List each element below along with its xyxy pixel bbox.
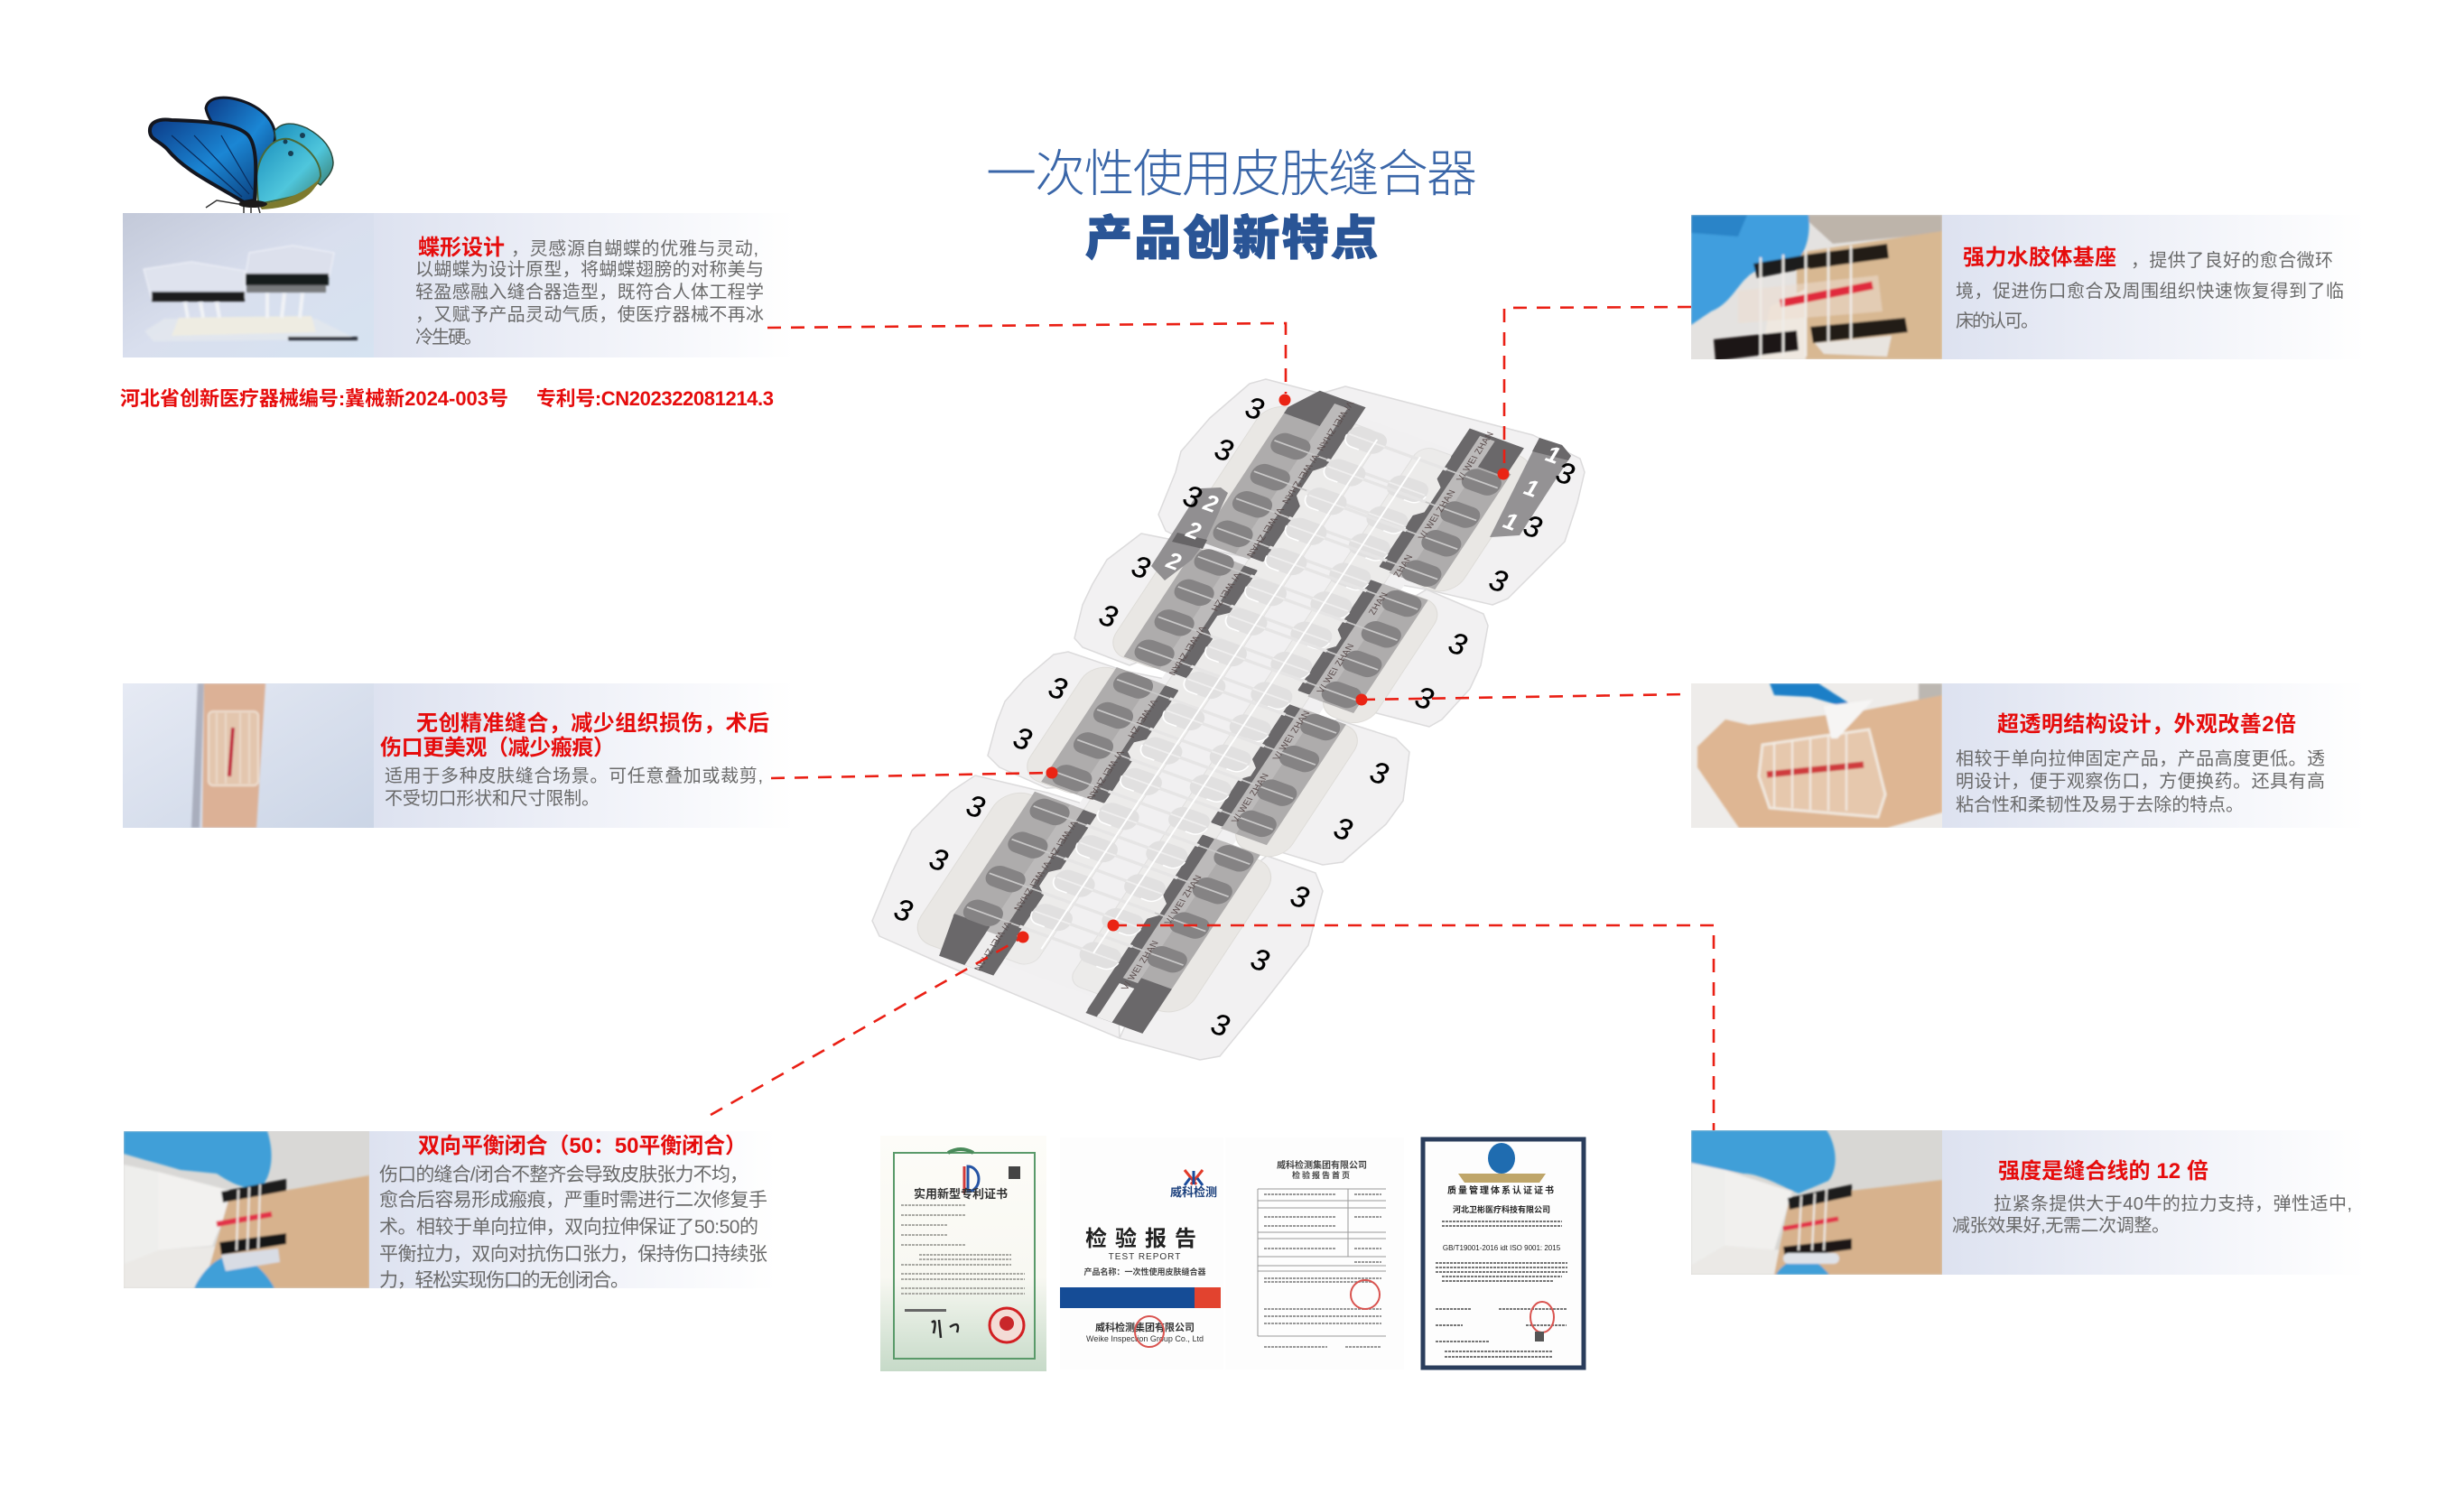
strip labels: V/ WEI ZHAN (972, 920, 1012, 972)
photo: hands applying device (1691, 215, 1942, 361)
heading: 超透明结构设计，外观改善2倍 (1997, 711, 2296, 737)
panel: hydrocolloid base (1691, 215, 2366, 361)
patent line (120, 387, 774, 410)
body text (1956, 748, 2325, 815)
numerals 3: 3 (1411, 680, 1438, 717)
numerals 3: 3 (1095, 598, 1122, 635)
certificate: utility model patent: 实用新型专利证书 (914, 1187, 1008, 1201)
certificate: test report first page (1225, 1137, 1404, 1369)
white guide lines (1041, 440, 1421, 965)
strip labels: ZHAN (1367, 591, 1390, 616)
tab: number 1 (1490, 438, 1571, 537)
strip labels: ZHAN (1392, 553, 1416, 579)
body text: 适用于多种皮肤缝合场景。可任意叠加或裁剪, (385, 766, 763, 786)
tab: number 2: 2 (1182, 515, 1205, 545)
patent line: 专利号:CN202322081214.3 (536, 387, 774, 410)
strip labels (972, 384, 1496, 1019)
product illustration: butterfly skin stapler (872, 358, 1585, 1060)
strips and pads in device plane (901, 358, 1553, 1042)
strip labels: V/ WEI ZHAN (1455, 431, 1496, 483)
certificate: test report cover: 产品名称：一次性使用皮肤缝合器 (1083, 1267, 1206, 1277)
numerals 3: 3 (1485, 562, 1512, 599)
icon: butterfly (150, 97, 333, 213)
white label slots at ends (962, 931, 1137, 1023)
tab: number 2: 2 (1199, 488, 1223, 518)
bars and ovals (959, 403, 1506, 992)
heading: 强力水胶体基座 (1963, 245, 2116, 270)
body text: 明设计，便于观察伤口，方便换药。还具有高 (1956, 771, 2325, 792)
strip labels: V/ WEI ZH (1045, 819, 1079, 860)
numerals 3: 3 (962, 788, 990, 825)
body text (379, 1165, 767, 1291)
panel: strength (1691, 1130, 2366, 1275)
callout connectors (711, 307, 1714, 1130)
certificate: test report first page: 检验报告首页 (1292, 1170, 1352, 1180)
title line 2: 产品创新特点 (1085, 213, 1378, 265)
tab: number 1: 1 (1542, 440, 1564, 469)
certificate: quality management: 河北卫彬医疗科技有限公司 (1453, 1204, 1550, 1214)
body text: ，灵感源自蝴蝶的优雅与灵动, (511, 238, 758, 259)
body text: ，又赋予产品灵动气质，使医疗器械不再冰 (415, 304, 764, 325)
body text: 粘合性和柔韧性及易于去除的特点。 (1956, 794, 2244, 815)
body text: ，提供了良好的愈合微环 (2131, 250, 2333, 271)
strip labels: V/ WEI ZHAN (1084, 749, 1125, 801)
photo: arm with wound and tweezers (1691, 683, 1942, 828)
notched dark strips (980, 392, 1479, 1013)
body text: 平衡拉力，双向对抗伤口张力，保持伤口持续张 (379, 1244, 767, 1265)
body text (385, 766, 763, 809)
body text: 轻盈感融入缝合器造型，既符合人体工程学 (415, 282, 764, 302)
numerals 3: 3 (1009, 720, 1037, 757)
body text: 床的认可。 (1956, 311, 2039, 331)
body text: 境，促进伤口愈合及周围组织快速恢复得到了临 (1956, 281, 2344, 302)
certificate: test report first page: 威科检测集团有限公司 (1277, 1159, 1367, 1171)
numerals 3: 3 (1045, 670, 1072, 707)
strip labels: V/ WEI ZHAN (1166, 625, 1207, 676)
strip labels: V/ WEI ZHAN (1279, 452, 1320, 505)
numerals 3: 3 (1241, 390, 1269, 427)
section outlines (872, 379, 1585, 1060)
strip labels: V/ WEI ZHAN (1163, 874, 1204, 926)
strip labels: V/ WEI ZHAN (1417, 488, 1458, 541)
body text (1952, 1193, 2352, 1236)
body text: 术。相较于单向拉伸，双向拉伸保证了50:50的 (379, 1217, 758, 1238)
heading: 双向平衡闭合（50：50平衡闭合） (418, 1134, 747, 1158)
photo: forearm with patch (123, 683, 374, 828)
body text (415, 238, 764, 348)
strip labels: V/ WEI ZH (1125, 698, 1159, 738)
title line 1: 一次性使用皮肤缝合器 (986, 145, 1477, 202)
body text: 力，轻松实现伤口的无创闭合。 (379, 1270, 629, 1291)
numerals 3: 3 (1247, 942, 1274, 979)
heading: 无创精准缝合，减少组织损伤，术后 (416, 711, 769, 736)
panel: butterfly design (123, 213, 795, 357)
strip labels: V/ WEI ZHAN (1120, 940, 1161, 991)
photo: product on table (123, 213, 374, 357)
strip labels: V/ WEI ZHAN (1244, 506, 1285, 558)
numerals 3: 3 (1445, 626, 1472, 663)
certificate: test report cover: Weike Inspection Group Co., Ltd (1086, 1334, 1204, 1343)
body text: 减张效果好,无需二次调整。 (1952, 1215, 2170, 1236)
photo: gloved hands on forearm (124, 1131, 369, 1288)
numerals 3 (890, 390, 1579, 1044)
certificate: quality management: GB/T19001-2016 idt ISO 9001: 2015 (1443, 1244, 1561, 1252)
tab: number 1: 1 (1500, 506, 1521, 536)
panel: minimally invasive closure (123, 683, 795, 828)
inner pads (989, 416, 1465, 998)
numerals 3: 3 (890, 892, 917, 929)
numerals 3: 3 (1179, 478, 1206, 515)
body text: 不受切口形状和尺寸限制。 (385, 788, 600, 809)
strip labels: V/ WEI ZHAN (1314, 400, 1355, 452)
certificate: quality management: 质量管理体系认证证书 (1447, 1184, 1556, 1196)
numerals 3: 3 (1366, 755, 1393, 792)
gray base bands (953, 395, 1511, 994)
body text: 伤口的缝合/闭合不整齐会导致皮肤张力不均， (379, 1165, 748, 1185)
panel: bidirectional closure (124, 1131, 776, 1291)
heading: 蝶形设计 (418, 236, 505, 260)
end caps (927, 371, 1528, 1034)
heading (380, 711, 769, 760)
outer pads (907, 369, 1546, 1033)
heading: 伤口更美观（减少瘢痕） (380, 736, 615, 760)
tab: number 1: 1 (1520, 473, 1542, 503)
panel: transparent structure (1691, 683, 2366, 828)
title (986, 145, 1477, 265)
body text: 相较于单向拉伸固定产品，产品高度更低。透 (1956, 748, 2325, 769)
photo: gloved hand on forearm (1691, 1130, 1942, 1275)
patent line: 河北省创新医疗器械编号:冀械新2024-003号 (120, 387, 508, 410)
body text: 愈合后容易形成瘢痕，严重时需进行二次修复手 (379, 1190, 767, 1211)
numerals 3: 3 (925, 841, 953, 878)
numerals 3: 3 (1520, 508, 1547, 545)
strip labels: V/ WEI ZHAN (1011, 859, 1052, 912)
strip labels: V/ WEI ZHAN (1271, 710, 1313, 762)
label strips (986, 387, 1495, 987)
certificate: utility model patent (880, 1136, 1046, 1371)
numerals 3: 3 (1128, 549, 1155, 586)
numerals 3: 3 (1552, 455, 1579, 492)
centre sheet (980, 409, 1485, 1008)
certificate: test report cover: 威科检测 (1170, 1185, 1217, 1199)
marker dots (1017, 394, 1510, 942)
heading: 强度是缝合线的 12 倍 (1998, 1158, 2208, 1184)
certificate: test report cover: 检验报告 (1085, 1226, 1204, 1251)
strip labels: V/ WEI ZH (1208, 571, 1242, 612)
body text: 拉紧条提供大于40牛的拉力支持，弹性适中, (1994, 1193, 2352, 1214)
numerals 3: 3 (1287, 878, 1314, 915)
certificate: test report cover (1060, 1137, 1223, 1369)
strip labels: V/ WEI ZHAN (1230, 772, 1271, 824)
strip labels: V/ WEI ZHAN (1316, 643, 1357, 694)
tab: number 2: 2 (1162, 546, 1186, 576)
numerals 3: 3 (1207, 1007, 1234, 1044)
certificate: test report cover: TEST REPORT (1109, 1252, 1181, 1262)
body text: 以蝴蝶为设计原型，将蝴蝶翅膀的对称美与 (415, 259, 764, 280)
certificate: quality management (1423, 1139, 1584, 1368)
certificate: test report cover: 威科检测集团有限公司 (1095, 1321, 1195, 1333)
body text: 冷生硬。 (415, 327, 482, 348)
numerals 3: 3 (1211, 432, 1238, 469)
numerals 3: 3 (1330, 811, 1357, 848)
body text (1956, 250, 2344, 331)
tab: number 2 (1151, 487, 1228, 580)
